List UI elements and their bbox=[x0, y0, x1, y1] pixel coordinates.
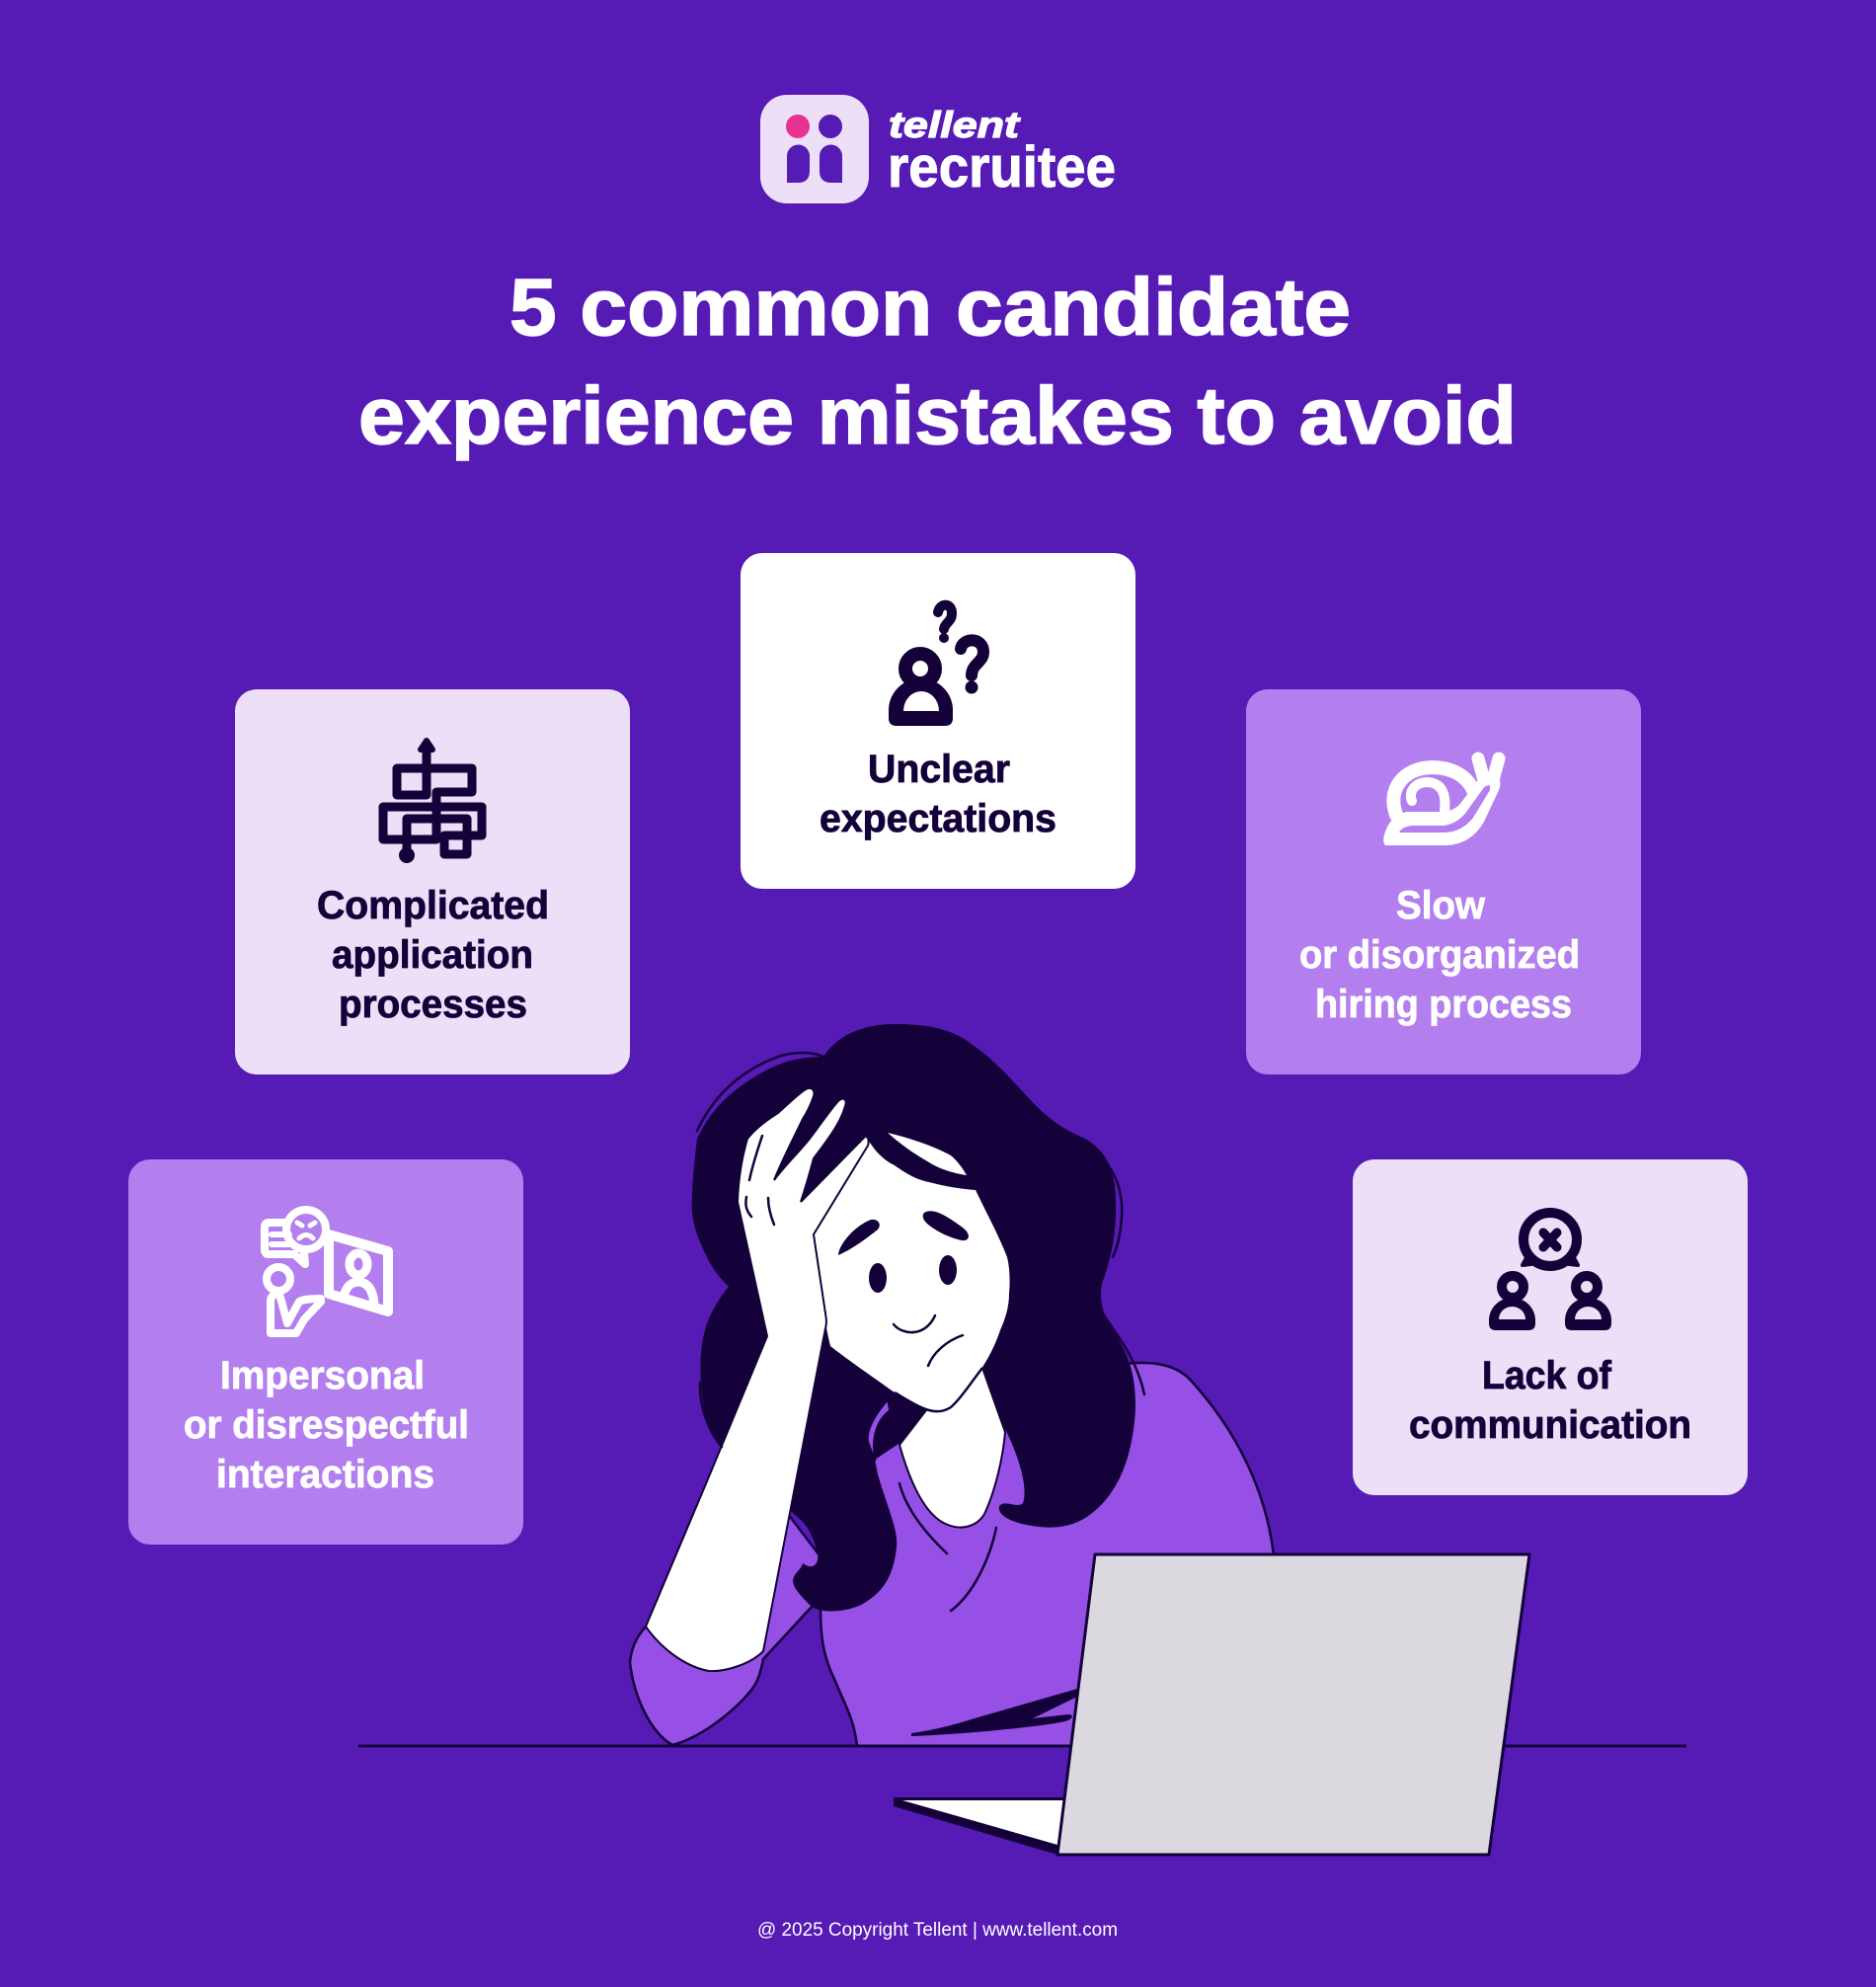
card label bbox=[1409, 1354, 1691, 1447]
card label: Lack of bbox=[1482, 1354, 1612, 1397]
card label bbox=[184, 1354, 469, 1496]
arm and hand bbox=[646, 1088, 869, 1671]
card label: Complicated bbox=[317, 884, 549, 927]
panel: lack of communication bbox=[1353, 1159, 1748, 1495]
card label: Slow bbox=[1396, 884, 1486, 927]
logo wordmark: tellent bbox=[889, 105, 1021, 145]
card label bbox=[820, 748, 1056, 840]
icon: logo mark bbox=[760, 95, 869, 203]
card label: Unclear bbox=[868, 748, 1010, 791]
mouth and cheek lines bbox=[894, 1315, 963, 1366]
shirt folds bbox=[899, 1483, 996, 1611]
left sleeve bbox=[630, 1514, 820, 1745]
laptop bbox=[894, 1554, 1529, 1855]
collar sliver bbox=[868, 1400, 890, 1460]
card label: communication bbox=[1409, 1403, 1691, 1447]
card label: expectations bbox=[820, 797, 1056, 840]
hand creases bbox=[745, 1136, 774, 1225]
stray hair strands bbox=[697, 1053, 1144, 1447]
card label: processes bbox=[339, 983, 527, 1026]
table line bbox=[358, 1744, 1686, 1748]
icon: two people with blocked speech bubble bbox=[1489, 1213, 1611, 1330]
eyes bbox=[838, 1211, 969, 1293]
title: experience mistakes to avoid bbox=[358, 371, 1517, 461]
chin line bbox=[895, 1368, 982, 1411]
icon: person with question marks bbox=[889, 605, 983, 726]
card label bbox=[317, 884, 549, 1026]
title: 5 common candidate bbox=[509, 263, 1351, 353]
card label: Impersonal bbox=[220, 1354, 425, 1397]
card label bbox=[1299, 884, 1580, 1026]
panel: slow or disorganized hiring process bbox=[1246, 689, 1641, 1074]
logo wordmark bbox=[888, 105, 1116, 199]
neck and collar bbox=[899, 1368, 1005, 1528]
illustration: stressed woman at laptop bbox=[358, 1024, 1686, 1855]
footer copyright: @ 2025 Copyright Tellent | www.tellent.com bbox=[757, 1920, 1118, 1941]
hair bbox=[692, 1024, 1135, 1611]
card label: application bbox=[332, 933, 533, 977]
card label: or disrespectful bbox=[184, 1403, 469, 1447]
title bbox=[358, 263, 1517, 461]
panel: impersonal or disrespectful interactions bbox=[128, 1159, 523, 1545]
icon: flowchart bbox=[383, 741, 482, 861]
card label: or disorganized bbox=[1299, 933, 1580, 977]
card label: interactions bbox=[216, 1453, 434, 1496]
hair parting highlight bbox=[888, 1133, 967, 1175]
panel: complicated application processes bbox=[235, 689, 630, 1074]
panel: unclear expectations bbox=[741, 553, 1135, 889]
icon: snail bbox=[1383, 758, 1500, 845]
card label: hiring process bbox=[1315, 983, 1572, 1026]
logo: Tellent Recruitee bbox=[760, 95, 1116, 203]
face bbox=[814, 1136, 1010, 1411]
logo wordmark: recruitee bbox=[888, 135, 1116, 199]
shirt bbox=[821, 1333, 1274, 1746]
icon: people and angry speech bubble bbox=[265, 1210, 388, 1333]
